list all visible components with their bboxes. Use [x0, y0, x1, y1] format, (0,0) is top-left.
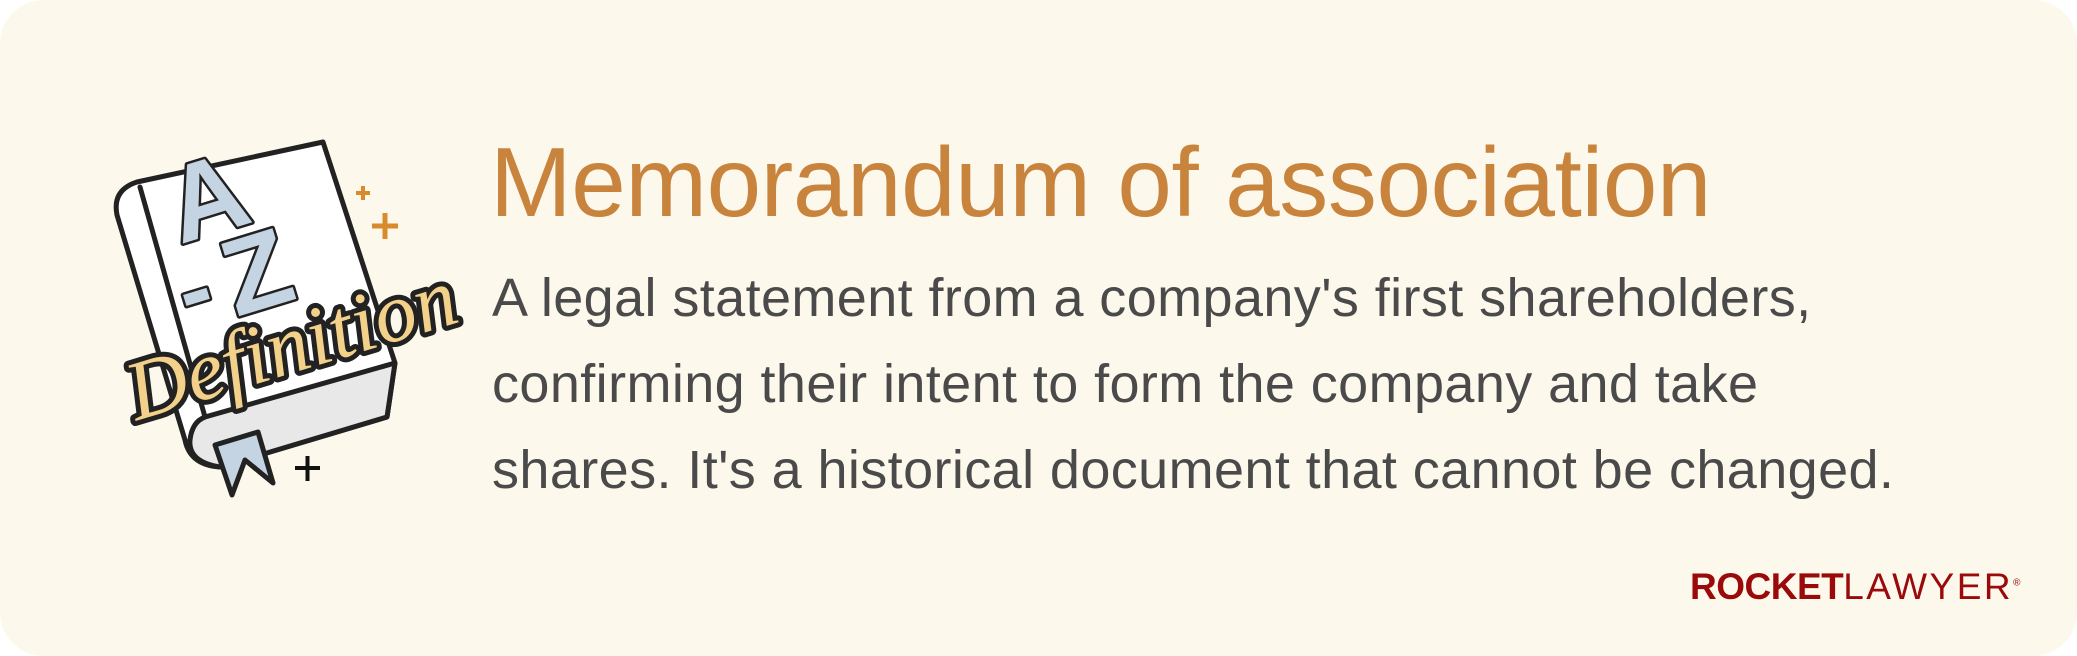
- title: Memorandum of association: [490, 127, 1711, 237]
- definition text: [492, 268, 1894, 500]
- logo: Rocket Lawyer: ROCKETLAWYER®: [1690, 566, 2020, 607]
- definition text: A legal statement from a company's first shareholders,: [492, 268, 1812, 328]
- icon: A-Z definition book: [114, 128, 468, 498]
- icon: A-Z definition book: -: [163, 234, 225, 345]
- definition text: confirming their intent to form the company and take: [492, 354, 1758, 414]
- definition text: shares. It's a historical document that cannot be changed.: [492, 440, 1894, 500]
- icon: A-Z definition book: Z: [208, 204, 306, 339]
- icon: A-Z definition book: Definition: [114, 250, 468, 439]
- icon: A-Z definition book: A: [152, 128, 262, 266]
